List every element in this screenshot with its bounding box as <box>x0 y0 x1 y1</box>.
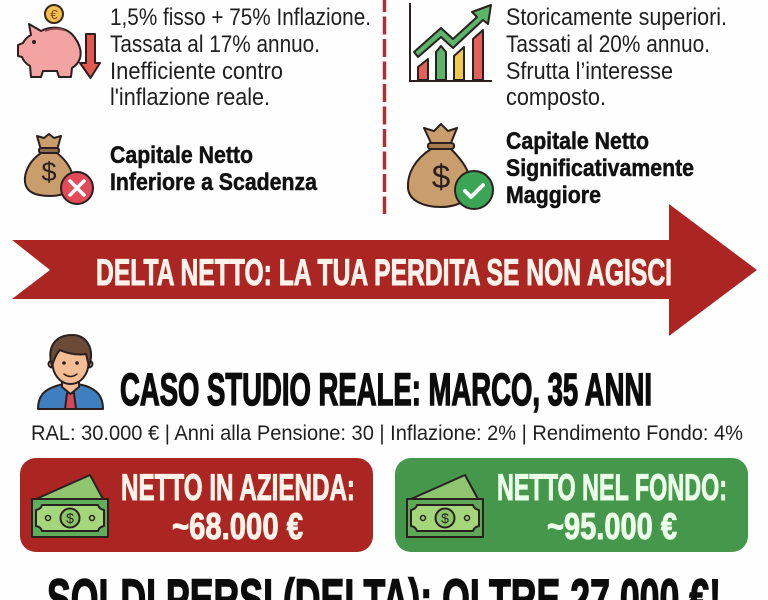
text: fondo amount: ~95.000 € <box>547 506 677 547</box>
icon: banknotes red panel <box>32 475 108 537</box>
text: left fund description: Tassata al 17% annuo. <box>110 31 320 58</box>
icon: banknotes green panel <box>407 475 483 537</box>
text: left conclusion: Inferiore a Scadenza <box>110 169 317 196</box>
icon: rising bar chart <box>410 3 492 81</box>
icon: man in shirt and tie <box>38 335 103 409</box>
icon: banknotes green panel: $ <box>441 510 449 526</box>
text: right fund description: Storicamente superiori. <box>506 4 727 31</box>
text: fondo amount <box>497 467 727 547</box>
panel: netto nel fondo <box>395 458 748 552</box>
icon: piggy bank with falling arrow <box>18 5 100 78</box>
text: right fund description <box>506 4 727 111</box>
icon: piggy bank with falling arrow: € <box>50 7 58 22</box>
text: left conclusion <box>110 142 317 196</box>
text: azienda amount <box>121 467 355 547</box>
text: left fund description <box>110 4 371 111</box>
text: left conclusion: Capitale Netto <box>110 142 253 169</box>
text: case study parameters: RAL: 30.000 € | Anni alla Pensione: 30 | Inflazione: 2% | Rendimento Fondo: 4% <box>31 422 743 445</box>
icon: money bag with red cross: $ <box>41 157 57 187</box>
text: right fund description: composto. <box>506 84 606 111</box>
text: right conclusion: Significativamente <box>506 155 694 182</box>
text: left fund description: 1,5% fisso + 75% Inflazione. <box>110 4 371 31</box>
text: right fund description: Tassati al 20% annuo. <box>506 31 710 58</box>
text: right fund description: Sfrutta l’interesse <box>506 58 673 85</box>
text: right conclusion <box>506 128 694 209</box>
text: right conclusion: Maggiore <box>506 182 601 209</box>
icon: money bag with green check <box>408 124 493 209</box>
text: azienda amount: NETTO IN AZIENDA: <box>121 467 355 508</box>
text: left fund description: Inefficiente contro <box>110 58 283 85</box>
text: left fund description: l'inflazione reale. <box>110 84 270 111</box>
arrow: delta netto banner <box>12 204 757 336</box>
panel: netto in azienda <box>20 458 373 552</box>
text: right conclusion: Capitale Netto <box>506 128 649 155</box>
icon: money bag with red cross <box>25 134 93 204</box>
icon: money bag with green check: $ <box>432 158 450 195</box>
icon: banknotes red panel: $ <box>66 510 74 526</box>
text: azienda amount: ~68.000 € <box>172 506 303 547</box>
